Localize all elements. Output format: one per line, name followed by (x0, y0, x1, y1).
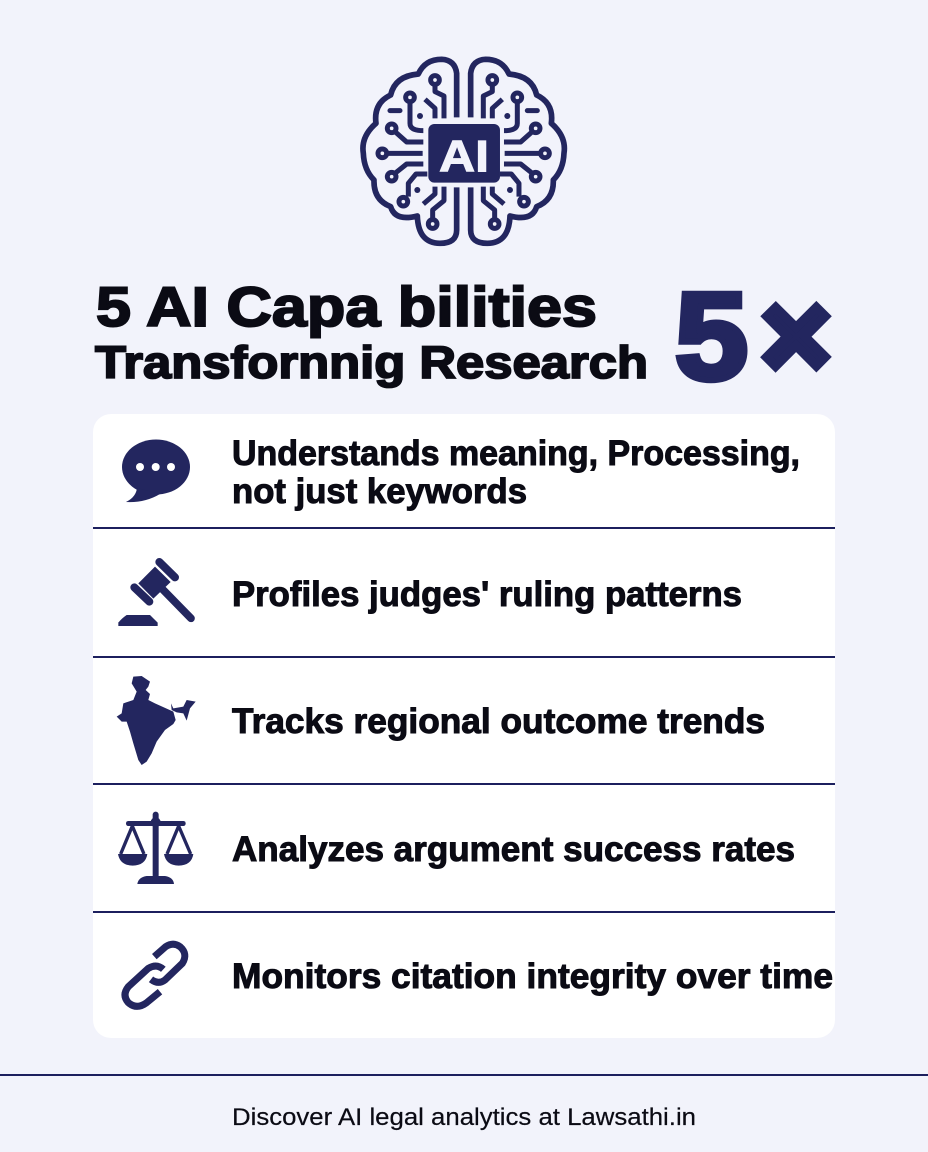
text: understands meaning: not just keywords (232, 472, 527, 511)
icon: speech bubble (122, 440, 190, 502)
text: understands meaning (232, 434, 800, 511)
icon: scales of justice (118, 812, 193, 884)
text: judges: Profiles judges' ruling patterns (232, 575, 742, 614)
5x multiplier (675, 268, 830, 406)
icon: AI brain (363, 59, 564, 243)
text: understands meaning: Understands meaning, Processing, (232, 434, 800, 473)
5x multiplier: × (762, 270, 830, 402)
title: 5 AI Capa bilities (96, 275, 597, 338)
icon: AI brain: AI (439, 133, 489, 182)
text: argument: Analyzes argument success rates (232, 830, 795, 869)
title: Transfornnig Research (95, 337, 648, 388)
5x multiplier: 5 (675, 268, 748, 406)
panel: capabilities card (93, 414, 835, 1038)
icon: gavel (118, 562, 191, 626)
text: regional: Tracks regional outcome trends (232, 702, 765, 741)
text: citation: Monitors citation integrity over time (232, 957, 833, 996)
icon: India map (117, 676, 196, 765)
title (95, 275, 648, 388)
footer divider (0, 1074, 928, 1076)
icon: chain link (125, 944, 185, 1006)
footer text: Discover AI legal analytics at Lawsathi.in (232, 1104, 696, 1131)
